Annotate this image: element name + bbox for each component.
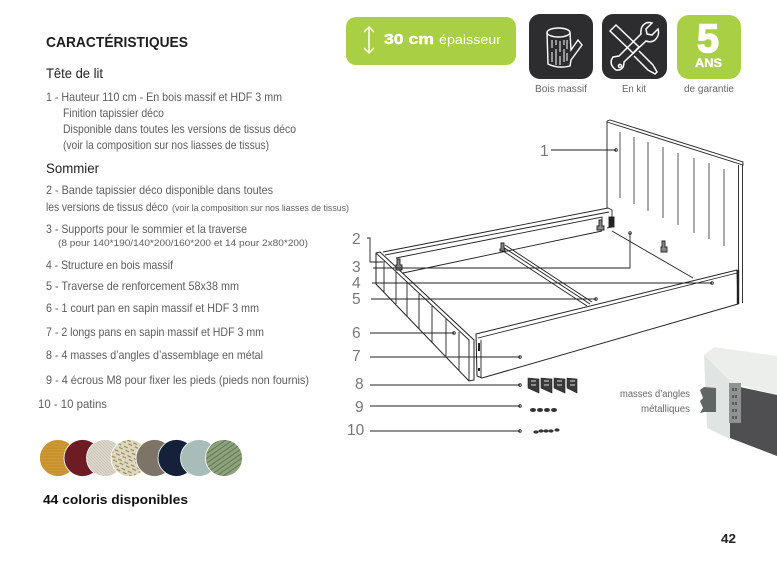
- item 6: 6 - 1 court pan en sapin massif et HDF 3 mm: [46, 301, 259, 315]
- callout numbers: 6: [352, 325, 361, 342]
- cross beam: [500, 245, 592, 306]
- colour swatches: [40, 440, 242, 476]
- item 2: les versions de tissus déco: [46, 200, 168, 214]
- photo: metal corner bracket: [700, 347, 777, 456]
- icon: vertical arrow: [364, 27, 374, 53]
- short side panel: [376, 252, 474, 381]
- item 8: 8 - 4 masses d’angles d’assemblage en métal: [46, 348, 263, 362]
- bed diagram: [347, 120, 743, 439]
- brackets: [396, 217, 667, 270]
- badge: thickness: [346, 17, 516, 65]
- item 1: Disponible dans toutes les versions de tissus déco: [63, 122, 296, 136]
- callout numbers: 4: [352, 275, 361, 292]
- callout numbers: 7: [352, 348, 361, 365]
- text block: sommier: [38, 160, 349, 411]
- long side panel: [476, 270, 738, 378]
- hardware: corner brackets: [528, 378, 577, 393]
- callout numbers: 5: [352, 291, 361, 308]
- item 2: 2 - Bande tapissier déco disponible dans toutes: [46, 183, 273, 197]
- callout numbers: 2: [352, 231, 361, 248]
- text block: tête de lit: [46, 65, 296, 152]
- badge: thickness: épaisseur: [439, 32, 502, 47]
- heading: tête de lit: Tête de lit: [46, 65, 103, 81]
- badge: warranty: [677, 15, 741, 79]
- item 5: 5 - Traverse de renforcement 58x38 mm: [46, 279, 239, 293]
- item 1: (voir la composition sur nos liasses de tissus): [63, 138, 269, 152]
- photo caption: [620, 389, 690, 415]
- item 1: Finition tapissier déco: [63, 106, 164, 120]
- back rail: [383, 208, 693, 278]
- label: kit: En kit: [622, 84, 646, 95]
- badge: thickness: 30 cm: [384, 31, 434, 48]
- hardware: pads: [533, 428, 560, 434]
- headboard: [607, 120, 743, 304]
- callout numbers: 1: [540, 143, 549, 160]
- item 3: 3 - Supports pour le sommier et la traverse: [46, 222, 247, 236]
- callout numbers: 3: [352, 259, 361, 276]
- title: CARACTÉRISTIQUES: [46, 34, 188, 51]
- item 7: 7 - 2 longs pans en sapin massif et HDF 3 mm: [46, 325, 264, 339]
- badge: warranty: 5: [697, 17, 719, 61]
- item 2: [46, 183, 349, 214]
- item 2: (voir la composition sur nos liasses de tissus): [172, 203, 349, 213]
- item 3: [46, 222, 308, 248]
- icon: solid wood: [529, 14, 593, 79]
- icon: tools: [602, 14, 667, 79]
- callout lines: [367, 149, 713, 432]
- callout numbers: 9: [355, 399, 364, 416]
- label: warranty: de garantie: [684, 84, 734, 95]
- swatch caption: 44 coloris disponibles: [43, 492, 188, 507]
- item 1: 1 - Hauteur 110 cm - En bois massif et HDF 3 mm: [46, 90, 282, 104]
- label: solid wood: Bois massif: [535, 84, 587, 95]
- item 10: 10 - 10 patins: [38, 397, 107, 411]
- photo caption: métalliques: [641, 404, 690, 415]
- hardware: nuts: [530, 408, 557, 412]
- callout numbers: [347, 143, 549, 439]
- photo caption: masses d’angles: [620, 389, 690, 400]
- page number: 42: [721, 532, 736, 546]
- item 9: 9 - 4 écrous M8 pour fixer les pieds (pieds non fournis): [46, 373, 309, 387]
- badge: warranty: ANS: [695, 58, 722, 70]
- callout numbers: 8: [355, 376, 364, 393]
- item 4: 4 - Structure en bois massif: [46, 258, 174, 272]
- item 1: [46, 90, 296, 152]
- heading: sommier: Sommier: [46, 160, 99, 176]
- callout numbers: 10: [347, 422, 365, 439]
- item 3: (8 pour 140*190/140*200/160*200 et 14 pour 2x80*200): [58, 238, 308, 248]
